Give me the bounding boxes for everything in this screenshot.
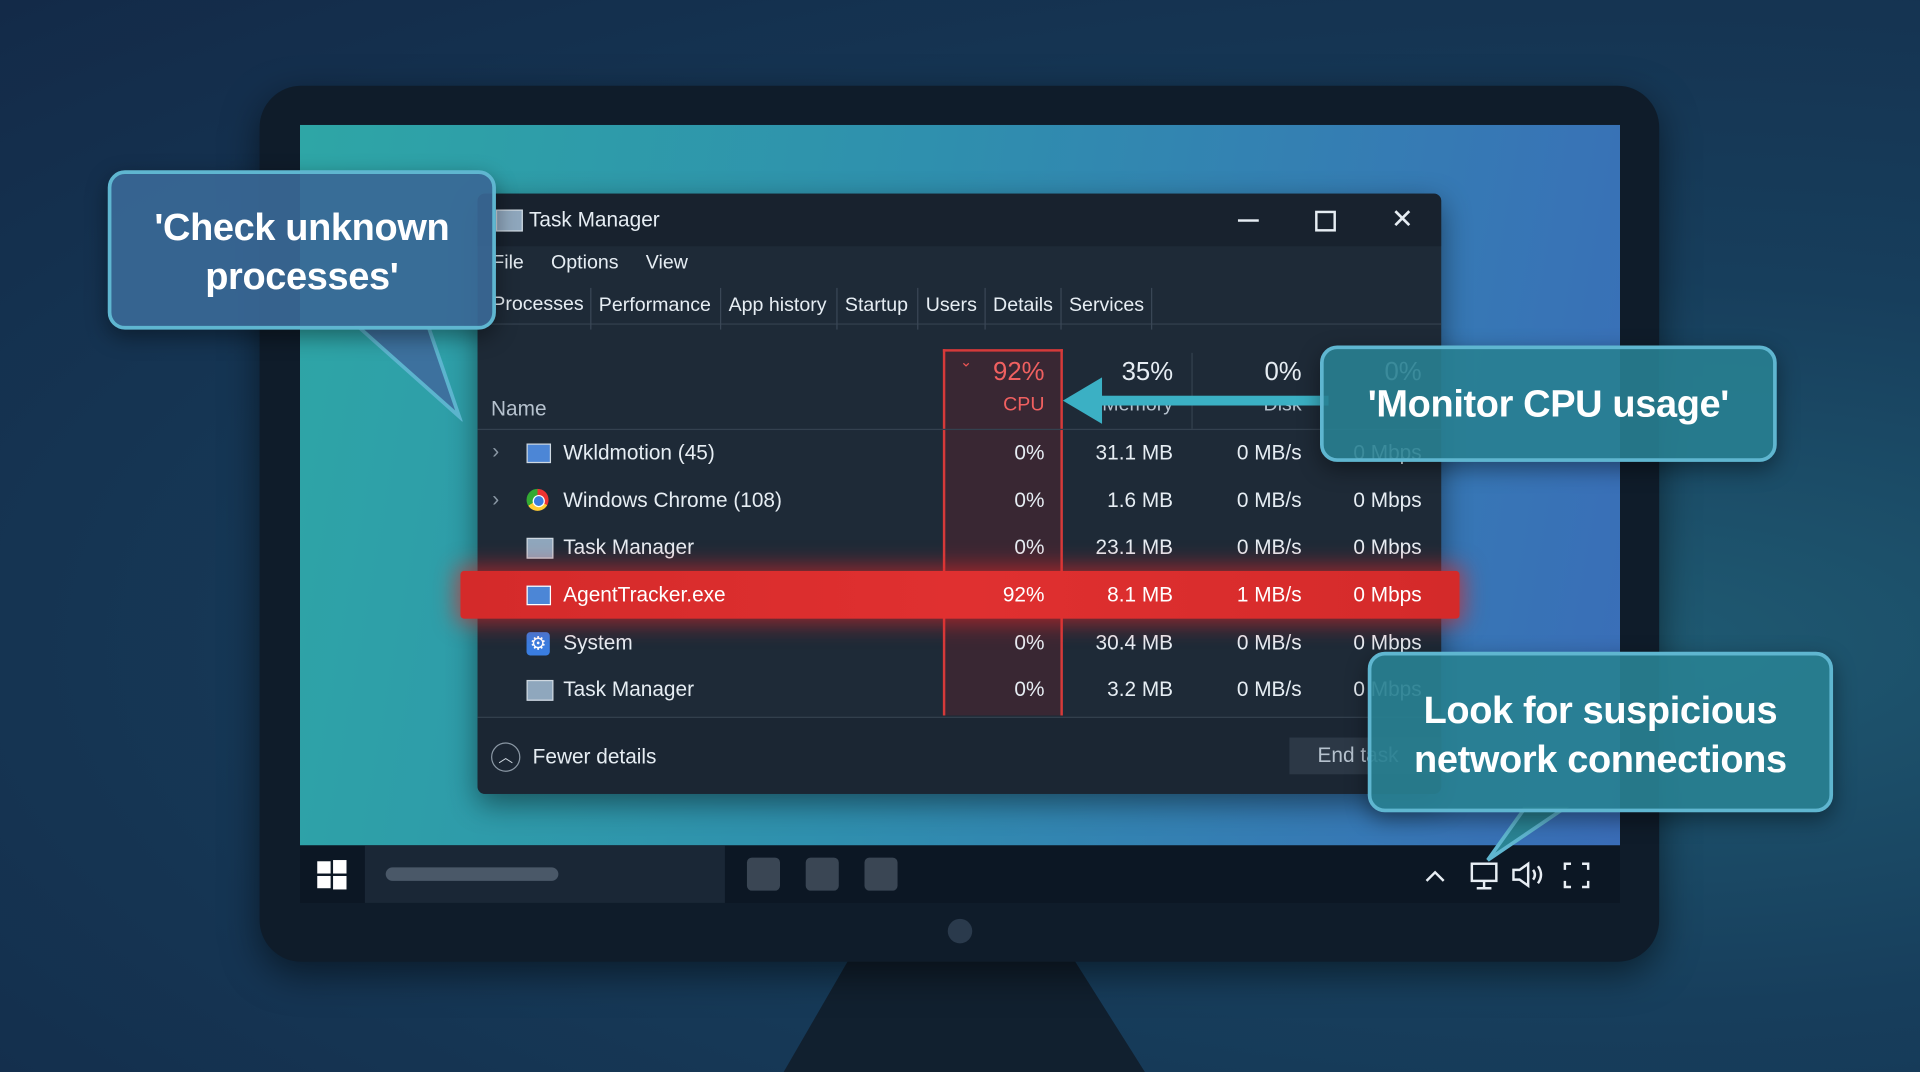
process rows: 0 Mbps [1353,631,1422,654]
tabs: Startup [845,295,908,316]
highlighted row: AgentTracker.exe [460,571,1460,619]
tabs [478,288,1441,325]
process rows: 0 Mbps [1353,535,1422,559]
tray icons [1426,861,1590,890]
process rows: 31.1 MB [1096,441,1173,464]
taskbar [300,845,1620,903]
process rows: 0 MB/s [1237,678,1302,701]
process rows: Task Manager [563,535,694,559]
icon: windows logo [317,860,346,890]
highlighted row: AgentTracker.exe: 1 MB/s [1237,583,1302,606]
process rows: 1.6 MB [1107,489,1173,512]
process rows: 30.4 MB [1096,631,1173,654]
title bar: ✕ [1391,203,1414,234]
tabs: Users [926,295,977,316]
highlighted row: AgentTracker.exe: 8.1 MB [1107,583,1173,606]
tabs: App history [729,295,827,316]
column headers: 35% [1122,358,1173,386]
callout: check unknown processes: 'Check unknown [154,206,449,249]
column headers: CPU [1003,394,1044,415]
callout: monitor CPU usage: 'Monitor CPU usage' [1368,382,1729,425]
title bar [478,194,1441,246]
process rows: System [563,631,633,654]
callout: look for suspicious network connections: network connections [1414,738,1787,780]
column headers: 0% [1264,358,1302,386]
arrow: callout to CPU column [1063,378,1328,424]
process rows: 0% [1014,441,1044,464]
footer: ︿ [498,749,513,766]
highlighted row: AgentTracker.exe: AgentTracker.exe [563,583,726,606]
process rows: 0 MB/s [1237,441,1302,464]
highlighted row: AgentTracker.exe: 0 Mbps [1353,583,1422,606]
tabs: Details [993,295,1053,316]
process rows: Task Manager [563,678,694,701]
process rows: 0% [1014,631,1044,654]
process rows: 0% [1014,678,1044,701]
highlighted row: AgentTracker.exe: 92% [1003,583,1044,606]
column headers: ⌄ [960,353,972,370]
process rows: Wkldmotion (45) [563,441,715,464]
process rows: 0 Mbps [1353,489,1422,512]
footer: End task [1318,744,1399,767]
process rows: 0% [1014,489,1044,512]
tabs: Services [1069,295,1144,316]
process rows [492,440,1422,701]
column headers: Memory [1102,394,1173,415]
column headers: Name [491,397,547,420]
column headers [478,353,1441,430]
footer: Fewer details [533,745,656,768]
callout: monitor CPU usage [1320,345,1777,462]
tabs: Performance [599,295,711,316]
process rows: 0 MB/s [1237,535,1302,559]
screen [300,125,1620,845]
column headers: 0% [1384,358,1422,386]
process rows: ⚙ [530,633,546,654]
callout: look for suspicious network connections [1354,644,1843,862]
column headers: Disk [1264,394,1302,415]
process rows: › [492,488,499,511]
process rows: 0 Mbps [1353,678,1422,701]
process rows: 0% [1014,535,1044,559]
power button [948,919,972,943]
cpu column highlight [943,349,1063,715]
process rows: 0 MB/s [1237,489,1302,512]
callout: check unknown processes [100,166,510,422]
column headers: 92% [993,358,1044,386]
task manager window [478,194,1441,794]
taskbar app icons [747,858,898,891]
process rows: 23.1 MB [1096,535,1173,559]
process rows: 0 MB/s [1237,631,1302,654]
title bar: Task Manager [529,208,660,232]
process rows: Windows Chrome (108) [563,489,782,512]
menu bar: File Options View [492,252,688,273]
callout: check unknown processes: processes' [205,255,398,298]
search bar [365,845,725,903]
process rows: › [492,440,499,463]
monitor bezel [260,86,1659,962]
footer [478,717,1441,795]
callout: look for suspicious network connections: Look for suspicious [1424,689,1777,731]
process rows: 0 Mbps [1353,441,1422,464]
process rows: 3.2 MB [1107,678,1173,701]
tabs: Processes [492,294,584,315]
